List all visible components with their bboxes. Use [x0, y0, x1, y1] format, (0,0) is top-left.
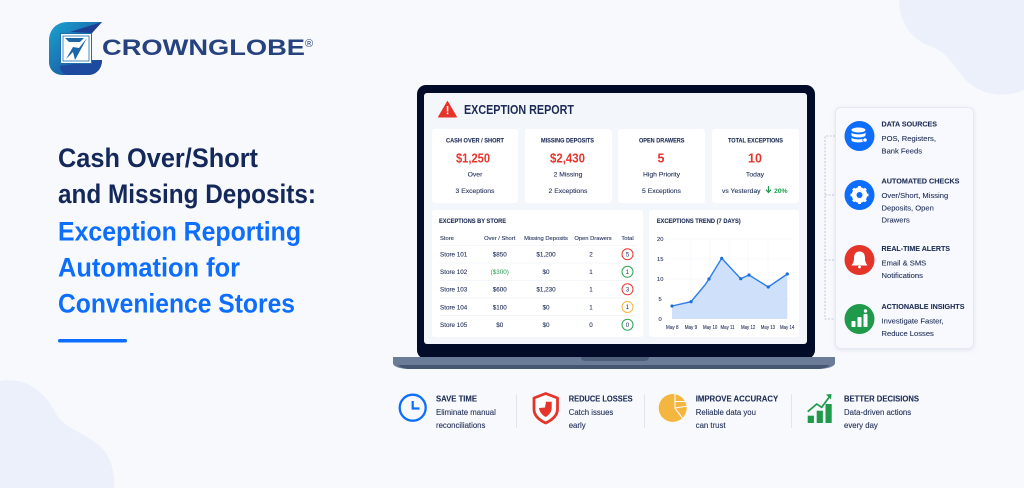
x axis labels: May 12 — [741, 325, 755, 331]
icon: bell — [844, 245, 874, 275]
title — [58, 143, 316, 318]
KPI card: cash over / short: Over — [468, 172, 483, 178]
table rows: Store 104 — [440, 304, 468, 311]
laptop base — [393, 357, 835, 369]
chart heading: EXCEPTIONS TREND (7 DAYS) — [657, 218, 741, 225]
table rows: Store — [440, 236, 454, 242]
table rows: $0 — [542, 269, 550, 276]
KPI card: total exceptions — [712, 129, 799, 203]
logo mark — [49, 22, 102, 75]
step: automated checks: Over/Short, Missing — [882, 191, 948, 200]
line series — [670, 257, 789, 308]
step: real-time alerts — [844, 244, 950, 280]
base shading — [398, 365, 830, 369]
KPI card: open drawers — [618, 129, 705, 203]
table rows: 2 — [589, 251, 593, 258]
table rows: Store 105 — [440, 322, 468, 329]
KPI card: cash over / short: 3 Exceptions — [456, 188, 495, 195]
table rows: 1 — [589, 286, 593, 294]
table panel: exceptions by store — [432, 210, 643, 337]
KPI card: missing deposits: 2 Exceptions — [549, 188, 588, 195]
KPI card: missing deposits: $2,430 — [550, 152, 585, 166]
table rows: $0 — [542, 322, 550, 329]
benefit: better decisions: BETTER DECISIONS — [844, 394, 919, 404]
title: Convenience Stores — [58, 288, 295, 318]
registered mark: ® — [305, 38, 313, 50]
KPI card: total exceptions: vs Yesterday — [722, 188, 761, 195]
table rows: Store 103 — [440, 286, 468, 294]
table heading: EXCEPTIONS BY STORE — [439, 218, 506, 225]
title: Automation for — [58, 252, 240, 282]
table rows: Store 101 — [440, 251, 468, 258]
panel: workflow steps — [836, 108, 974, 348]
step: automated checks — [844, 176, 960, 224]
y axis labels — [657, 237, 663, 323]
background blob: bottom left — [0, 380, 114, 488]
x axis labels: May 14 — [780, 325, 794, 331]
step: actionable insights: Reduce Losses — [882, 329, 934, 338]
table rows: Total — [621, 236, 634, 242]
laptop — [393, 85, 835, 369]
icon: shield — [534, 394, 558, 423]
icon: bar chart badge — [844, 304, 874, 334]
total badges — [622, 249, 633, 330]
KPI card: open drawers: High Priority — [643, 172, 681, 178]
y axis labels: 0 — [658, 317, 662, 323]
x axis labels: May 13 — [761, 325, 775, 331]
table rows: $850 — [493, 251, 507, 258]
screen — [424, 93, 807, 344]
step: actionable insights: ACTIONABLE INSIGHTS — [882, 302, 964, 311]
total badges: 1 — [626, 269, 630, 276]
x axis labels: May 8 — [666, 325, 679, 331]
step: automated checks: AUTOMATED CHECKS — [882, 176, 960, 186]
KPI card: cash over / short: $1,250 — [456, 152, 490, 166]
benefit: improve accuracy: Reliable data you — [696, 408, 756, 417]
title: and Missing Deposits: — [58, 179, 316, 209]
step: real-time alerts: REAL-TIME ALERTS — [882, 244, 950, 253]
icon: pie chart — [659, 393, 688, 422]
y axis labels: 15 — [657, 257, 663, 263]
KPI card: total exceptions: Today — [746, 172, 765, 178]
report header — [438, 102, 574, 117]
step: actionable insights — [844, 302, 964, 338]
benefit: reduce losses: early — [569, 421, 586, 430]
benefit: save time: SAVE TIME — [436, 394, 477, 404]
step: data sources: DATA SOURCES — [882, 120, 937, 128]
logo — [49, 22, 313, 75]
table rows: 1 — [589, 269, 593, 276]
KPI card: open drawers: 5 Exceptions — [642, 188, 682, 195]
table rows: $0 — [496, 322, 504, 329]
x axis labels: May 10 — [703, 325, 717, 331]
step: data sources — [844, 120, 937, 155]
connector lines — [825, 136, 835, 319]
title: Exception Reporting — [58, 216, 301, 246]
icon: gear — [844, 180, 874, 210]
KPI card: total exceptions: 20% — [774, 188, 788, 195]
step: data sources: Bank Feeds — [882, 146, 922, 155]
table rows: $100 — [493, 304, 507, 311]
benefit: reduce losses: Catch issues — [569, 408, 613, 417]
step: automated checks: Drawers — [882, 216, 910, 224]
table rows: $0 — [542, 304, 550, 311]
table rows: $1,200 — [536, 251, 556, 258]
KPI card: missing deposits — [525, 129, 612, 203]
table rows: $600 — [493, 286, 507, 294]
title: Cash Over/Short — [58, 143, 258, 173]
KPI card: cash over / short: CASH OVER / SHORT — [446, 137, 504, 144]
total badges: 0 — [626, 322, 630, 329]
table rows: Store 102 — [440, 269, 468, 276]
benefit: save time: Eliminate manual — [436, 408, 496, 417]
KPI card: missing deposits: MISSING DEPOSITS — [541, 137, 594, 144]
icon: warning triangle — [438, 102, 456, 117]
chart panel: exceptions trend — [649, 210, 799, 337]
table rows — [439, 236, 637, 329]
table rows: Missing Deposits — [524, 236, 568, 242]
report title: EXCEPTION REPORT — [464, 102, 574, 117]
title underline — [58, 339, 127, 342]
step: actionable insights: Investigate Faster, — [882, 316, 944, 326]
KPI card: total exceptions: 10 — [748, 152, 762, 166]
total badges: 5 — [626, 252, 630, 258]
step: data sources: POS, Registers, — [882, 134, 936, 143]
logo wordmark: CROWNGLOBE — [102, 35, 305, 60]
table rows: 1 — [589, 304, 593, 311]
step: real-time alerts: Notifications — [882, 271, 923, 280]
x axis labels: May 11 — [720, 325, 735, 331]
KPI card: cash over / short — [432, 129, 518, 203]
benefit: reduce losses: REDUCE LOSSES — [569, 394, 633, 404]
KPI card: total exceptions: TOTAL EXCEPTIONS — [728, 137, 783, 144]
total badges: 1 — [626, 304, 630, 311]
benefit: better decisions: every day — [844, 421, 878, 430]
step: real-time alerts: Email & SMS — [882, 258, 926, 268]
icon: database — [844, 121, 874, 151]
step: automated checks: Deposits, Open — [882, 203, 934, 212]
benefit: improve accuracy: can trust — [696, 421, 726, 430]
icon: clock — [400, 395, 426, 421]
total badges: 3 — [626, 286, 630, 294]
background blob: top right — [899, 0, 1024, 95]
benefit: better decisions — [808, 394, 919, 430]
benefit: save time: reconciliations — [436, 421, 486, 430]
benefit: reduce losses — [534, 394, 633, 430]
benefit: improve accuracy: IMPROVE ACCURACY — [696, 394, 779, 404]
table rows: Over / Short — [484, 236, 516, 242]
laptop lid — [417, 85, 815, 359]
table rows: ($300) — [491, 269, 509, 276]
benefit: save time — [400, 394, 496, 430]
x axis labels: May 9 — [685, 325, 697, 331]
trackpad notch — [581, 357, 649, 361]
table rows: 0 — [589, 322, 593, 329]
table rows: Open Drawers — [574, 236, 612, 242]
KPI card: missing deposits: 2 Missing — [554, 172, 583, 178]
icon: growth chart — [808, 394, 832, 423]
KPI card: open drawers: 5 — [658, 152, 665, 166]
y axis labels: 10 — [657, 277, 663, 283]
table rows: $1,230 — [536, 286, 556, 294]
x axis labels — [666, 325, 794, 331]
y axis labels: 20 — [657, 237, 663, 243]
benefit: improve accuracy — [659, 393, 779, 430]
y axis labels: 5 — [658, 297, 662, 303]
KPI card: open drawers: OPEN DRAWERS — [639, 137, 684, 144]
benefit: better decisions: Data-driven actions — [844, 408, 911, 417]
area series — [672, 258, 787, 319]
